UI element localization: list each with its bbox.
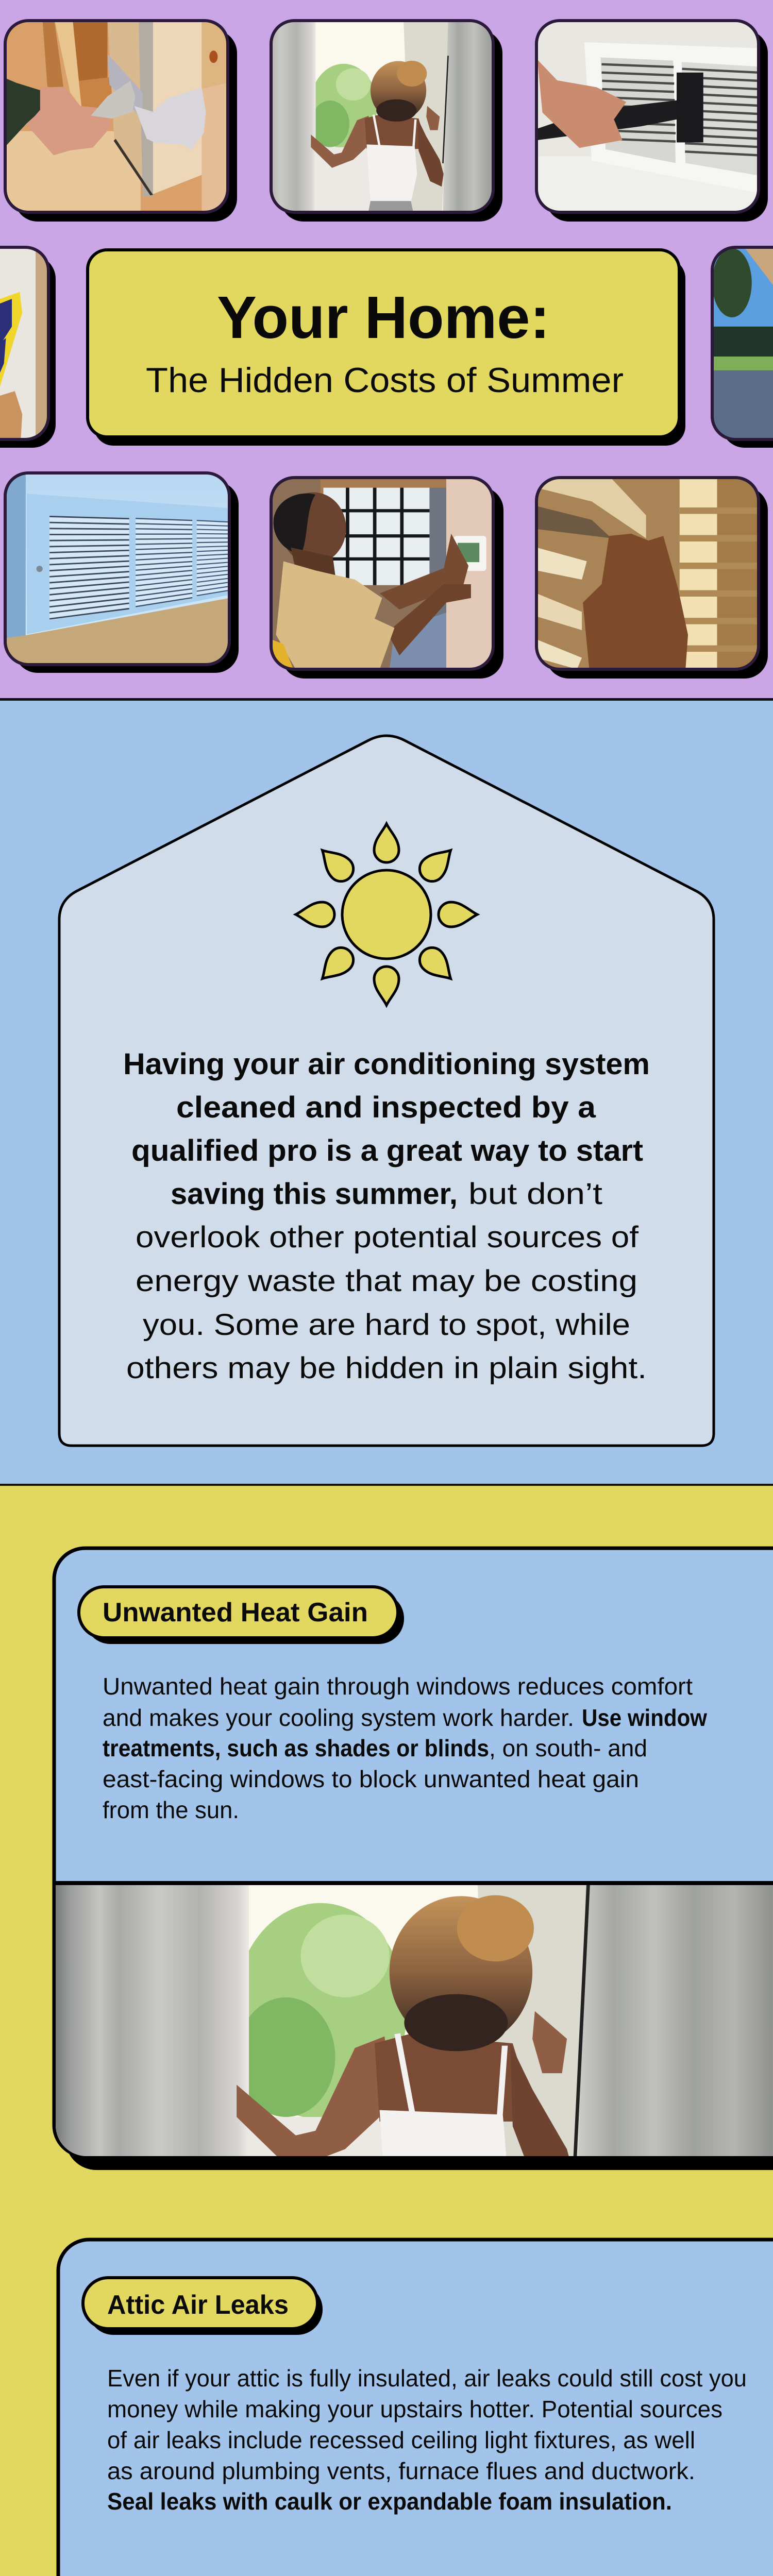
body text	[107, 2365, 747, 2515]
heading pill	[79, 1587, 404, 1644]
intro section	[0, 701, 773, 1486]
intro text: others may be hidden in plain sight.	[126, 1351, 647, 1385]
body text: and makes your cooling system work harder.	[103, 1704, 574, 1731]
photo tile: vent and carpet	[4, 471, 239, 673]
heading pill: Unwanted Heat Gain	[103, 1598, 368, 1628]
body text	[103, 1673, 707, 1823]
body text: Use window	[582, 1704, 707, 1731]
header section	[0, 19, 773, 701]
heading pill: Attic Air Leaks	[107, 2290, 289, 2320]
photo tile: caulk gun (cropped left)	[0, 247, 56, 448]
photo tile: man at thermostat	[271, 478, 503, 679]
intro text: Having your air conditioning system	[123, 1047, 650, 1081]
body text: east-facing windows to block unwanted heat gain	[103, 1766, 639, 1792]
body text: treatments, such as shades or blinds	[103, 1735, 489, 1761]
subtitle: The Hidden Costs of Summer	[146, 361, 624, 400]
body text: , on south- and	[489, 1735, 647, 1761]
body text: as around plumbing vents, furnace flues and ductwork.	[107, 2458, 695, 2484]
intro text: energy waste that may be costing	[136, 1264, 637, 1298]
icon: sun	[296, 824, 477, 1005]
divider	[53, 1881, 773, 1885]
body text: money while making your upstairs hotter. Potential sources	[107, 2396, 722, 2422]
intro text: cleaned and inspected by a	[176, 1091, 596, 1124]
photo tile: hand parting blinds	[536, 478, 768, 679]
body text: Unwanted heat gain through windows reduces comfort	[103, 1673, 693, 1700]
photo tile: vacuuming a vent	[536, 21, 768, 222]
panel: unwanted heat gain	[53, 1547, 773, 2170]
panel: house-shaped intro	[59, 736, 714, 1446]
heading pill	[83, 2278, 323, 2335]
body text: of air leaks include recessed ceiling light fixtures, as well	[107, 2427, 695, 2453]
photo: patching drywall	[49, 2512, 773, 2576]
intro text: overlook other potential sources of	[136, 1221, 639, 1254]
intro text: you. Some are hard to spot, while	[143, 1308, 630, 1342]
body text: Even if your attic is fully insulated, air leaks could still cost you	[107, 2365, 747, 2392]
intro text: saving this summer,	[171, 1177, 458, 1211]
intro text: qualified pro is a great way to start	[131, 1134, 643, 1167]
photo tile: woman at window	[270, 19, 502, 222]
intro text: but don’t	[468, 1177, 602, 1211]
tips section background	[0, 1486, 773, 2576]
panel: attic air leaks	[57, 2238, 773, 2576]
photo tile: drywall patch	[4, 19, 237, 222]
photo: woman at window	[56, 1885, 773, 2156]
title box	[88, 250, 685, 446]
body text: Seal leaks with caulk or expandable foam insulation.	[107, 2488, 672, 2515]
body text: from the sun.	[103, 1797, 239, 1823]
intro text	[123, 1047, 650, 1385]
title: Your Home:	[217, 284, 550, 351]
photo tile: house exterior (cropped right)	[712, 247, 773, 448]
